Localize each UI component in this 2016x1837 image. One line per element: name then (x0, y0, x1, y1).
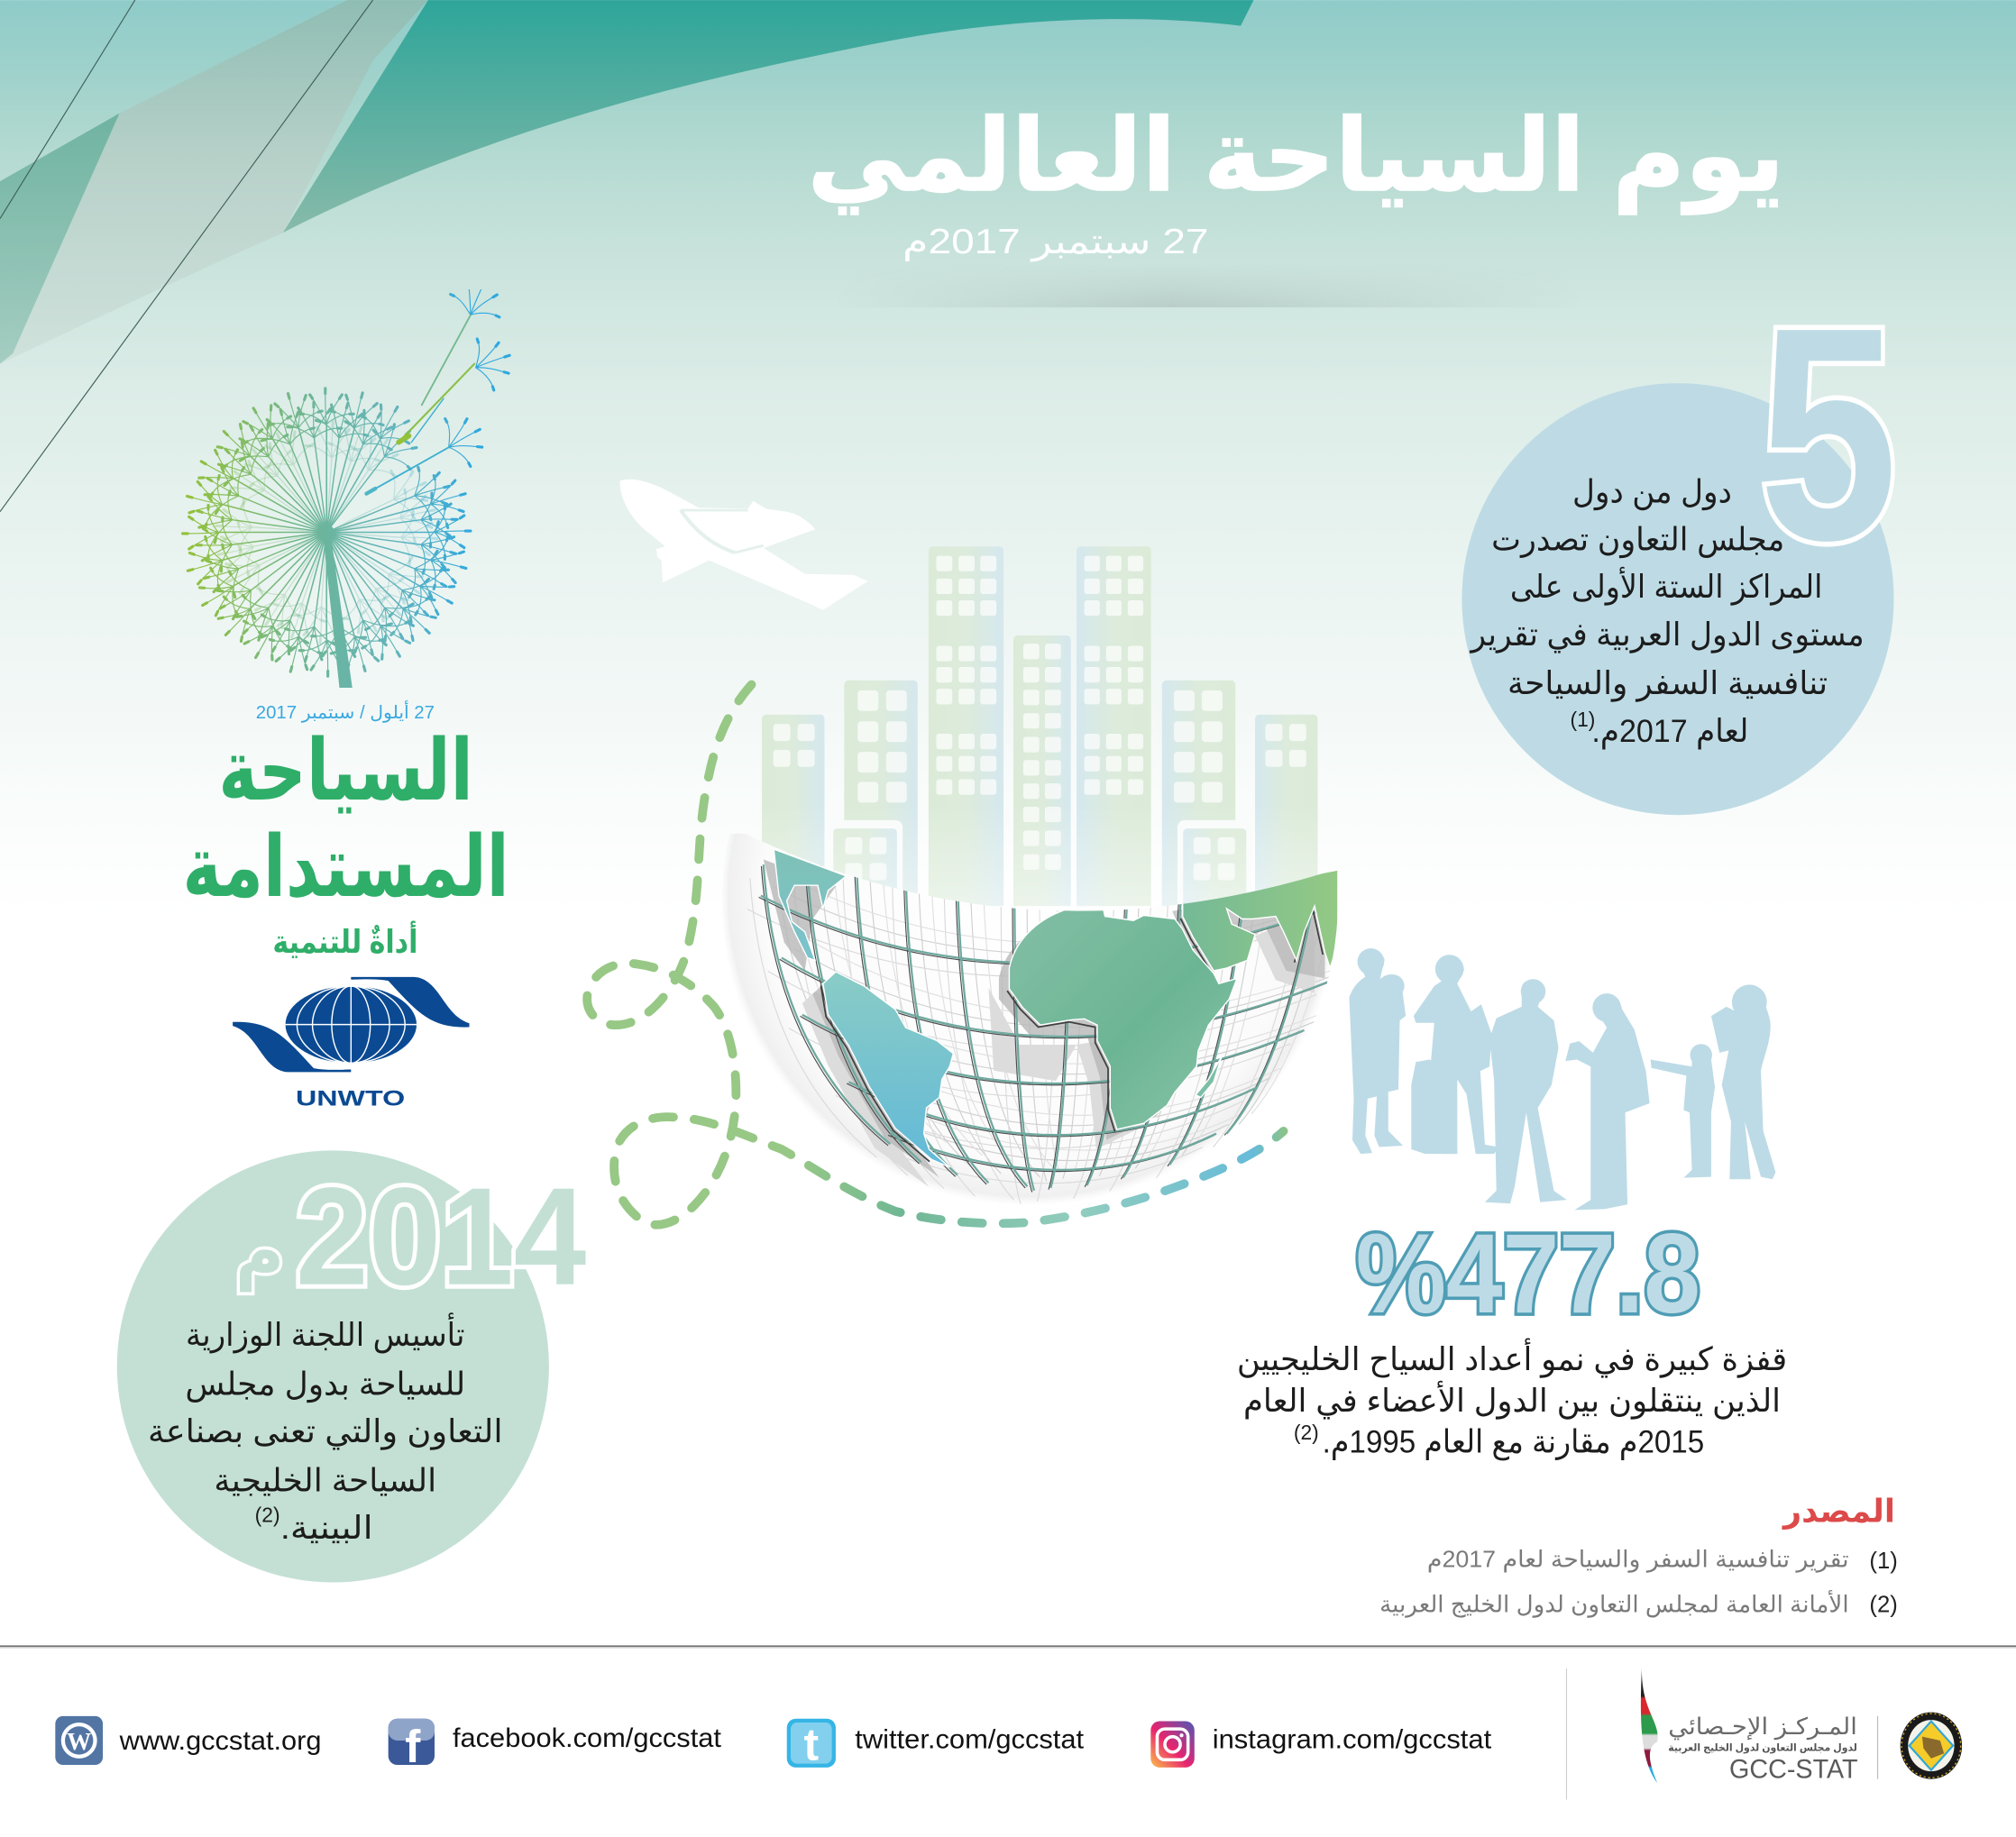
icon: wordpress (55, 1716, 103, 1765)
icon: instagram (1150, 1722, 1195, 1768)
fine grid lines (774, 855, 1345, 1182)
event date: 27 أيلول / سبتمبر 2017 (256, 700, 435, 723)
logo: GCC-STAT: المـركـز الإحـصائي (1668, 1714, 1857, 1741)
dandelion (180, 289, 511, 688)
logo: GCC-STAT: لدول مجلس التعاون لدول الخليج العربية (1668, 1742, 1857, 1753)
icon: twitter: t (804, 1719, 820, 1769)
icon: plane (620, 480, 868, 610)
2014 description: السياحة الخليجية (214, 1462, 436, 1498)
icon: facebook: f (405, 1721, 421, 1772)
source list: (1) (1869, 1549, 1898, 1574)
twitter link: twitter.com/gccstat (855, 1724, 1085, 1754)
dashed flight route (587, 685, 1284, 1225)
five countries text: مستوى الدول العربية في تقرير (1469, 617, 1865, 653)
2014 description (148, 1312, 503, 1546)
five countries text (1469, 474, 1865, 750)
title: يوم السياحة العالمي (808, 99, 1784, 215)
main grid lines (759, 866, 1331, 1193)
footer divider (0, 1645, 2016, 1800)
2014 description: تأسيس اللجنة الوزارية (186, 1312, 465, 1354)
five countries text: تنافسية السفر والسياحة (1507, 665, 1828, 702)
2014 description: التعاون والتي تعنى بصناعة (148, 1413, 503, 1450)
website link: www.gccstat.org (119, 1726, 322, 1756)
2014 description: البينية. (280, 1510, 373, 1546)
five countries text: (1) (1570, 708, 1595, 731)
buildings (762, 546, 1317, 913)
logo: GCC-STAT: GCC-STAT (1729, 1754, 1858, 1784)
percentage description: 2015م مقارنة مع العام 1995م. (1323, 1424, 1704, 1461)
year 2014 outlined: 2014 (296, 1159, 586, 1314)
illustration: plane, buildings, globe and dashed route (587, 480, 1358, 1225)
five countries text: المراكز الستة الأولى على (1510, 567, 1822, 606)
panel: five countries circle (1462, 383, 1894, 815)
title shadow (939, 277, 1455, 307)
big percentage figure: %477.8 (1356, 1210, 1700, 1337)
continents (820, 908, 1323, 1162)
source heading: المصدر (1782, 1494, 1895, 1531)
source list: تقرير تنافسية السفر والسياحة لعام 2017م (1427, 1547, 1849, 1573)
icon: wordpress: W (67, 1728, 91, 1755)
source list (1379, 1547, 1898, 1618)
year suffix: م (235, 1213, 284, 1293)
logo: UNWTO: UNWTO (296, 1086, 405, 1110)
five countries text: مجلس التعاون تصدرت (1491, 521, 1784, 558)
theme subheading: أداةٌ للتنمية (272, 920, 417, 960)
2014 description: (2) (255, 1503, 280, 1527)
globe (726, 834, 1338, 1204)
theme heading line 1: السياحة (218, 723, 473, 818)
percentage description: الذين ينتقلون بين الدول الأعضاء في العام (1243, 1381, 1781, 1420)
logo: UNWTO (233, 977, 469, 1110)
logo: GCC emblem (1901, 1713, 1962, 1779)
panel: 2014 circle (117, 1150, 549, 1583)
big number 5: 5 (1759, 265, 1898, 604)
2014 description: للسياحة بدول مجلس (185, 1366, 465, 1403)
theme heading line 2: المستدامة (182, 819, 509, 914)
five countries text: دول من دول (1572, 474, 1732, 511)
icon: facebook (389, 1719, 435, 1772)
source list: (2) (1869, 1592, 1898, 1617)
percentage description: قفزة كبيرة في نمو أعداد السياح الخليجيين (1237, 1338, 1787, 1378)
source list: الأمانة العامة لمجلس التعاون لدول الخليج العربية (1379, 1588, 1849, 1618)
facebook link: facebook.com/gccstat (453, 1723, 722, 1753)
logo: GCC-STAT (1641, 1668, 1878, 1784)
instagram link: instagram.com/gccstat (1213, 1724, 1492, 1754)
continent shadows (802, 910, 1315, 1187)
subtitle date: 27 سبتمبر 2017م (903, 223, 1208, 262)
header swoosh shapes (0, 0, 1253, 512)
people silhouettes (1349, 948, 1775, 1210)
percentage description (1237, 1338, 1787, 1461)
icon: twitter (787, 1719, 836, 1769)
percentage description: (2) (1294, 1421, 1319, 1444)
five countries text: لعام 2017م. (1591, 713, 1748, 750)
